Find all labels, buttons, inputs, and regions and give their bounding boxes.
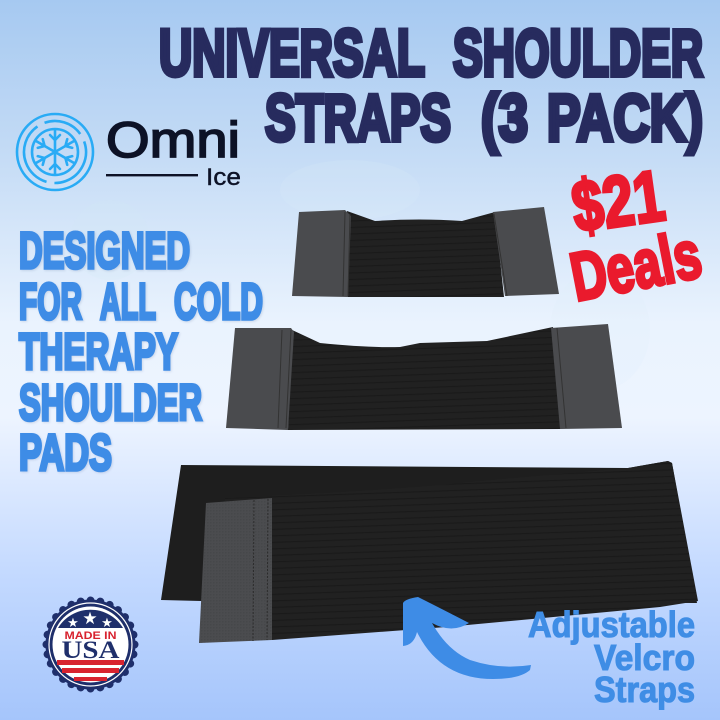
price callout bbox=[564, 156, 707, 316]
callout: adjustable velcro straps: Velcro bbox=[594, 637, 695, 678]
blue side heading: THERAPY bbox=[19, 323, 178, 380]
blue side heading: FOR bbox=[19, 273, 82, 330]
logo subtext: Ice bbox=[206, 164, 241, 191]
callout: adjustable velcro straps bbox=[528, 604, 695, 710]
blue side heading: ALL bbox=[100, 273, 156, 330]
callout: adjustable velcro straps: Straps bbox=[594, 669, 695, 710]
badge: made in USA bbox=[46, 600, 136, 690]
badge stripes bbox=[57, 660, 124, 681]
blue side heading bbox=[19, 222, 263, 481]
faint background snow shapes bbox=[70, 160, 650, 390]
badge stars bbox=[67, 609, 113, 631]
badge USA: USA bbox=[62, 637, 120, 664]
badge made in: MADE IN bbox=[64, 630, 117, 642]
logo rule bbox=[106, 174, 198, 176]
medium strap bbox=[226, 324, 622, 430]
price callout: $21 bbox=[567, 156, 669, 248]
strap front layer bbox=[215, 461, 698, 640]
title bbox=[159, 16, 703, 154]
blue side heading: SHOULDER bbox=[19, 374, 202, 431]
logo wordmark: Omni bbox=[106, 112, 240, 168]
blue side heading: PADS bbox=[19, 424, 112, 481]
small strap bbox=[292, 207, 559, 297]
title: UNIVERSAL bbox=[159, 16, 425, 90]
badge navy cap bbox=[58, 610, 123, 628]
icon: snowflake in rings bbox=[15, 112, 95, 192]
strap back layer bbox=[161, 461, 697, 603]
callout: adjustable velcro straps: Adjustable bbox=[528, 604, 695, 645]
velcro tab bbox=[199, 498, 272, 643]
arrow bbox=[403, 597, 531, 679]
title: STRAPS bbox=[265, 80, 451, 154]
badge stars: ★ bbox=[67, 616, 79, 631]
badge stars: ★ bbox=[82, 609, 98, 629]
blue side heading: COLD bbox=[174, 273, 263, 330]
logo: Omni Ice bbox=[15, 112, 241, 192]
badge stars: ★ bbox=[101, 616, 113, 631]
blue side heading: DESIGNED bbox=[19, 222, 190, 279]
title: (3 bbox=[481, 80, 528, 154]
large strap bbox=[161, 461, 698, 643]
